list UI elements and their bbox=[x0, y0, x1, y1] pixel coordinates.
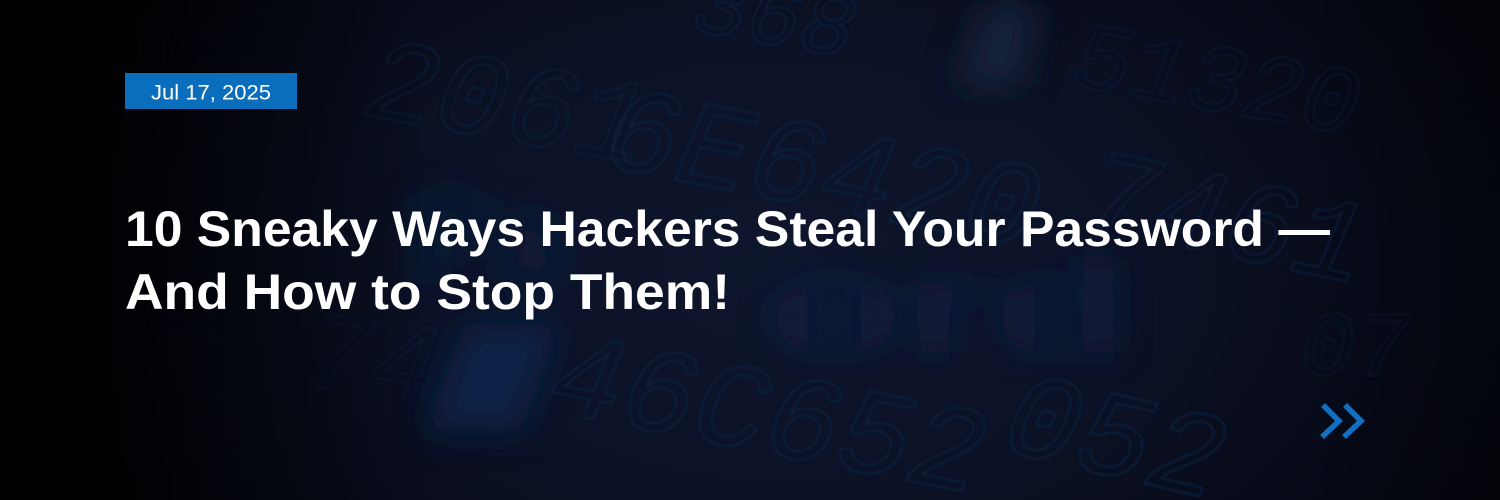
date badge bbox=[125, 73, 297, 109]
background: blurred word: ord bbox=[765, 234, 1130, 380]
title bbox=[125, 201, 1330, 320]
background: blurred word bbox=[410, 5, 1130, 430]
background: hex digits: 15 bbox=[135, 21, 243, 123]
background: hex digits: 7461 bbox=[1073, 130, 1377, 319]
background: hex digits: 2061 bbox=[356, 19, 658, 200]
title: And How to Stop Them! bbox=[125, 264, 730, 320]
icon: double chevron arrow bbox=[1322, 405, 1361, 437]
background: hex digits: 07 bbox=[1300, 298, 1411, 403]
date badge: Jul 17, 2025 bbox=[151, 82, 271, 104]
background: hex digits: 74 bbox=[295, 293, 446, 437]
title: 10 Sneaky Ways Hackers Steal Your Password — bbox=[125, 201, 1330, 257]
background: hex digits: 6E6420 bbox=[593, 65, 1051, 285]
background: hex digits bbox=[317, 0, 1410, 498]
background: blurred word: Pa bbox=[410, 167, 571, 313]
background: hex digits: 51320 bbox=[1065, 6, 1368, 164]
background: hex digits: 69 bbox=[130, 263, 240, 368]
